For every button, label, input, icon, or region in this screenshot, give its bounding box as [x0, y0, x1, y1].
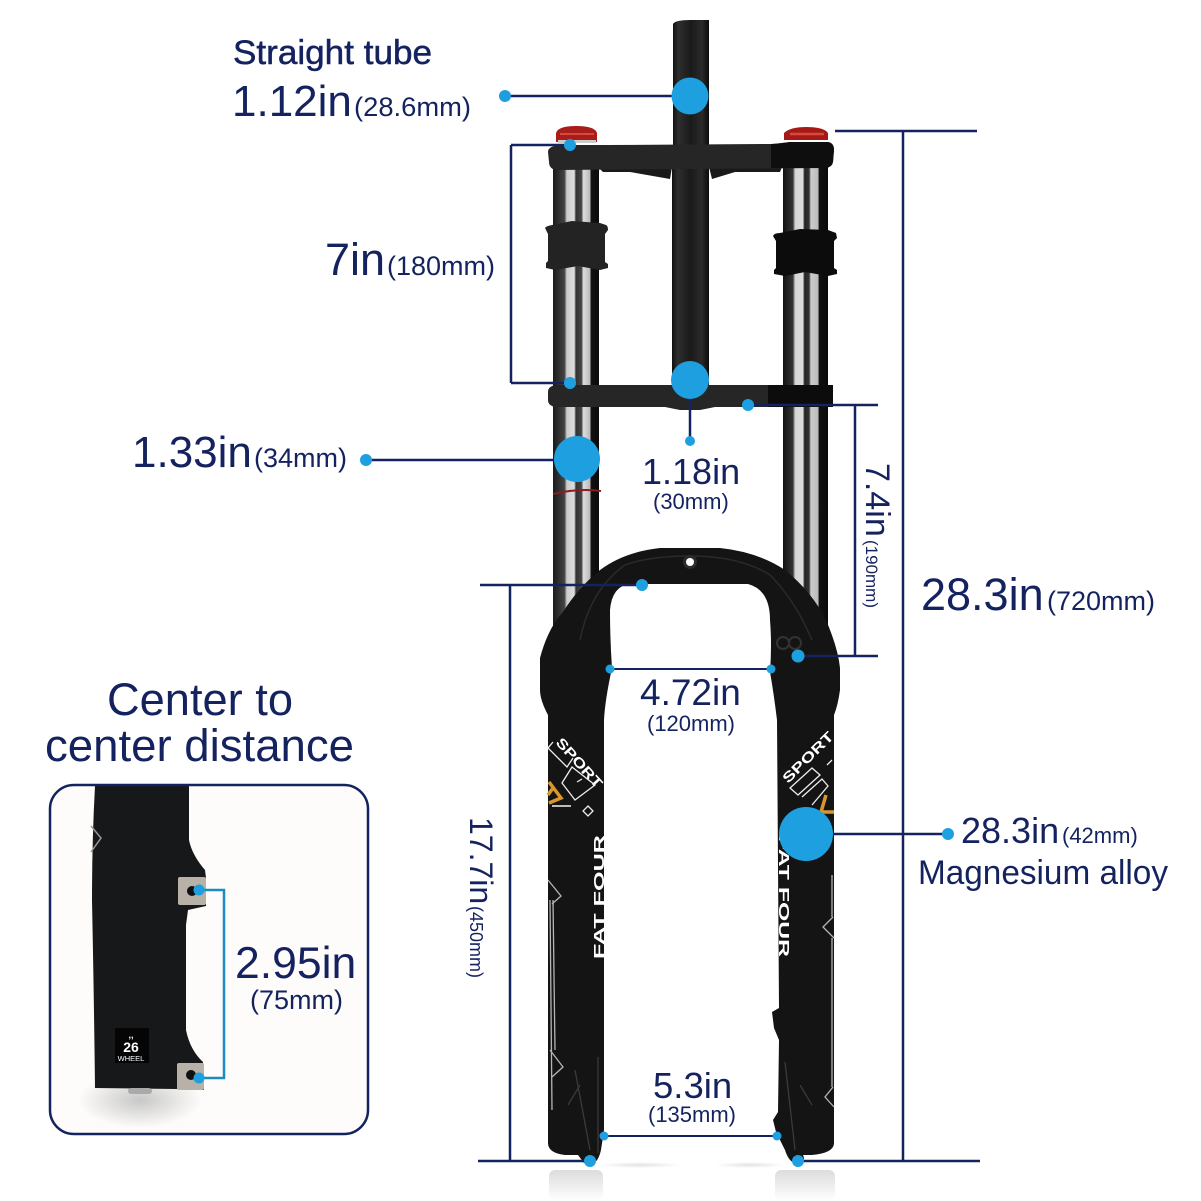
lower leg arch	[540, 548, 840, 1163]
label: lower leg 28.3in: 28.3in	[961, 810, 1059, 851]
FAT FOUR left text: FAT FOUR	[591, 835, 608, 959]
arch highlight	[580, 556, 812, 640]
label: 7.4in rotated	[858, 463, 896, 608]
upper crown	[548, 142, 834, 170]
leader: stanchion 1.33in	[360, 436, 600, 482]
inset mounting lug upper	[178, 877, 206, 905]
label: 2.95in: (75mm)	[250, 985, 343, 1015]
lower crown right shade	[768, 385, 833, 407]
right red cap	[784, 127, 828, 140]
heading: center to center distance: center distance	[45, 720, 354, 771]
right rubber band	[773, 229, 837, 276]
label: lower leg 28.3in	[961, 810, 1138, 851]
label: 5.3in: 5.3in	[653, 1065, 732, 1106]
label: 28.3in overall: 28.3in	[921, 569, 1044, 620]
dimension: 17.7in bracket	[480, 579, 648, 1161]
label: steerer 1.12in: (28.6mm)	[354, 92, 471, 122]
inset dimension line	[194, 884, 224, 1084]
right logo orange slash	[821, 795, 834, 812]
leader: crown tube 1.18in	[671, 361, 709, 446]
fork illustration	[540, 20, 840, 1201]
wheel size badge: 26	[123, 1039, 139, 1055]
panel: center to center inset	[50, 785, 368, 1134]
left logo orange slash	[548, 782, 561, 803]
dimension: 7in bracket	[511, 139, 576, 389]
overall height dimension	[478, 131, 980, 1161]
left logo: SPORT	[553, 734, 607, 792]
right logo: SPORT	[779, 728, 837, 786]
dimension: 5.3in	[600, 1132, 782, 1140]
right stanchion	[783, 160, 828, 630]
wheel size badge: ,,	[128, 1030, 134, 1040]
label: 7in: (180mm)	[387, 251, 495, 281]
label: 1.18in: (30mm)	[653, 489, 729, 514]
label: 17.7in rotated	[463, 817, 499, 978]
left rubber band	[545, 221, 608, 270]
center crown tube	[672, 165, 709, 390]
floor shadow	[598, 1162, 785, 1168]
inset fork leg	[92, 786, 206, 1090]
label: 17.7in rotated: 17.7in	[463, 817, 499, 904]
inset holes	[186, 886, 197, 1080]
leader: lower leg 28.3in	[779, 807, 954, 861]
inset axle bolt	[128, 1088, 152, 1094]
label: 7in: 7in	[325, 234, 385, 285]
label: 1.18in: 1.18in	[642, 451, 740, 492]
label: 5.3in: (135mm)	[648, 1102, 736, 1127]
label: 2.95in: 2.95in	[235, 939, 356, 988]
label: 4.72in: 4.72in	[640, 672, 741, 713]
label: 7.4in rotated: (190mm)	[862, 540, 881, 608]
label: lower leg 28.3in: (42mm)	[1062, 823, 1138, 848]
label: 28.3in overall: (720mm)	[1047, 586, 1155, 616]
left leg outline graphics	[548, 880, 598, 1153]
left stanchion	[553, 160, 599, 630]
heading: center to center distance: Center to	[107, 674, 293, 725]
label: 7.4in rotated: 7.4in	[858, 463, 896, 537]
left red cap	[556, 126, 597, 143]
arch bolt hole	[683, 555, 697, 569]
label: 1.33in: 1.33in	[132, 428, 252, 477]
wheel size badge	[115, 1028, 149, 1063]
label: steerer 1.12in: 1.12in	[232, 77, 352, 126]
label: 1.33in	[132, 428, 347, 477]
bottom dots	[584, 1155, 804, 1167]
label: magnesium alloy: Magnesium alloy	[918, 854, 1168, 892]
air valve	[777, 637, 801, 649]
red line marking	[553, 490, 601, 494]
inset chevron	[91, 826, 101, 852]
inset background	[50, 785, 368, 1134]
floor reflection left	[549, 1170, 603, 1201]
label: 5.3in	[648, 1065, 736, 1127]
label: 4.72in	[640, 672, 741, 736]
label: 17.7in rotated: (450mm)	[466, 906, 486, 978]
label: 1.18in	[642, 451, 740, 514]
inset shadow	[78, 1072, 202, 1128]
label: steerer 1.12in	[232, 77, 471, 126]
label: 2.95in	[235, 939, 356, 1015]
floor reflection right	[775, 1170, 835, 1201]
dimension: 7.4in bracket	[742, 399, 878, 662]
label: 1.33in: (34mm)	[254, 443, 347, 473]
steerer tube	[673, 20, 709, 150]
heading: center to center distance	[45, 674, 354, 771]
leader: steerer diameter	[499, 78, 708, 114]
upper crown underside wedges	[598, 167, 782, 179]
heading: straight tube: Straight tube	[233, 34, 432, 72]
right logo	[779, 728, 837, 812]
label: 28.3in overall	[921, 569, 1155, 620]
lower crown	[548, 385, 833, 410]
left logo	[548, 734, 607, 816]
right leg outline graphics	[785, 875, 834, 1150]
FAT FOUR right text: FAT FOUR	[775, 835, 792, 957]
wheel size badge: WHEEL	[118, 1054, 144, 1063]
inset mounting lug lower	[177, 1063, 204, 1090]
label: 7in	[325, 234, 495, 285]
label: 4.72in: (120mm)	[647, 711, 735, 736]
dimension: 4.72in	[606, 664, 776, 674]
upper crown right shade	[771, 142, 834, 168]
inset border	[50, 785, 368, 1134]
